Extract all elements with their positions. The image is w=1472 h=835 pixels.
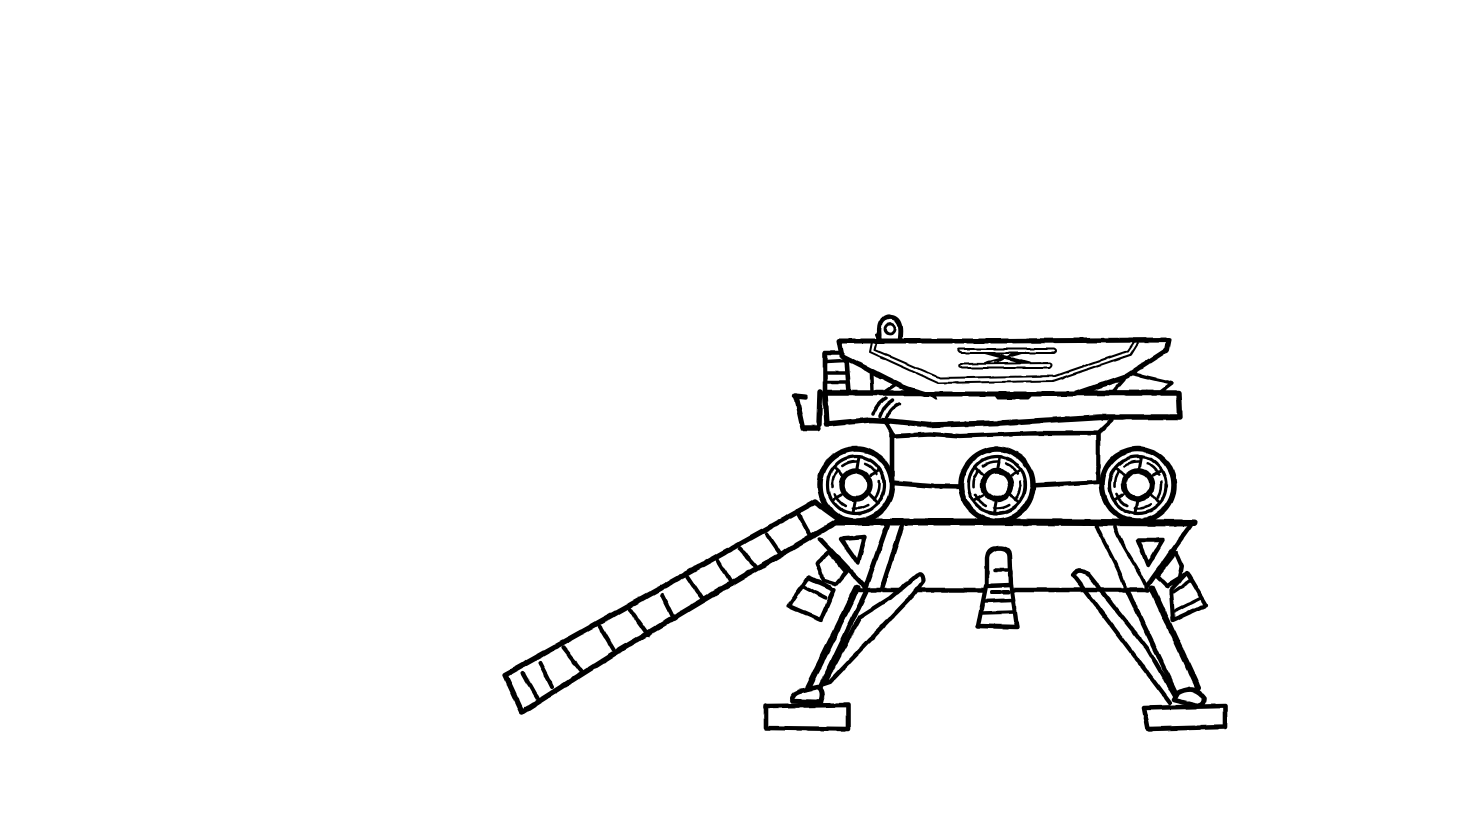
right rear nozzle <box>1157 552 1206 620</box>
ramp slats <box>523 515 811 698</box>
left triangle panel <box>841 537 865 563</box>
solar panel lid <box>839 340 1169 394</box>
panel inset double line <box>870 342 1138 383</box>
hook <box>795 392 820 428</box>
left landing leg <box>766 574 923 729</box>
lander descent stage <box>820 522 1194 590</box>
rover deck <box>795 353 1180 436</box>
antenna ring <box>877 317 901 340</box>
right triangle panel <box>1138 540 1163 565</box>
right landing leg <box>1073 571 1225 729</box>
rover body <box>892 433 1098 487</box>
rover wheels <box>820 433 1174 521</box>
left rear nozzle <box>789 552 846 620</box>
side box <box>825 353 849 392</box>
left ankle joint <box>792 687 822 702</box>
lander top deck <box>835 522 1194 523</box>
rear folded panel <box>1080 372 1172 392</box>
centre engine nozzle <box>978 548 1017 627</box>
ramp <box>505 502 840 712</box>
panel emblem <box>958 349 1056 368</box>
deck slab <box>825 393 1180 425</box>
right foot pad <box>1144 706 1225 729</box>
right ankle joint <box>1174 689 1204 706</box>
left foot pad <box>766 705 848 729</box>
